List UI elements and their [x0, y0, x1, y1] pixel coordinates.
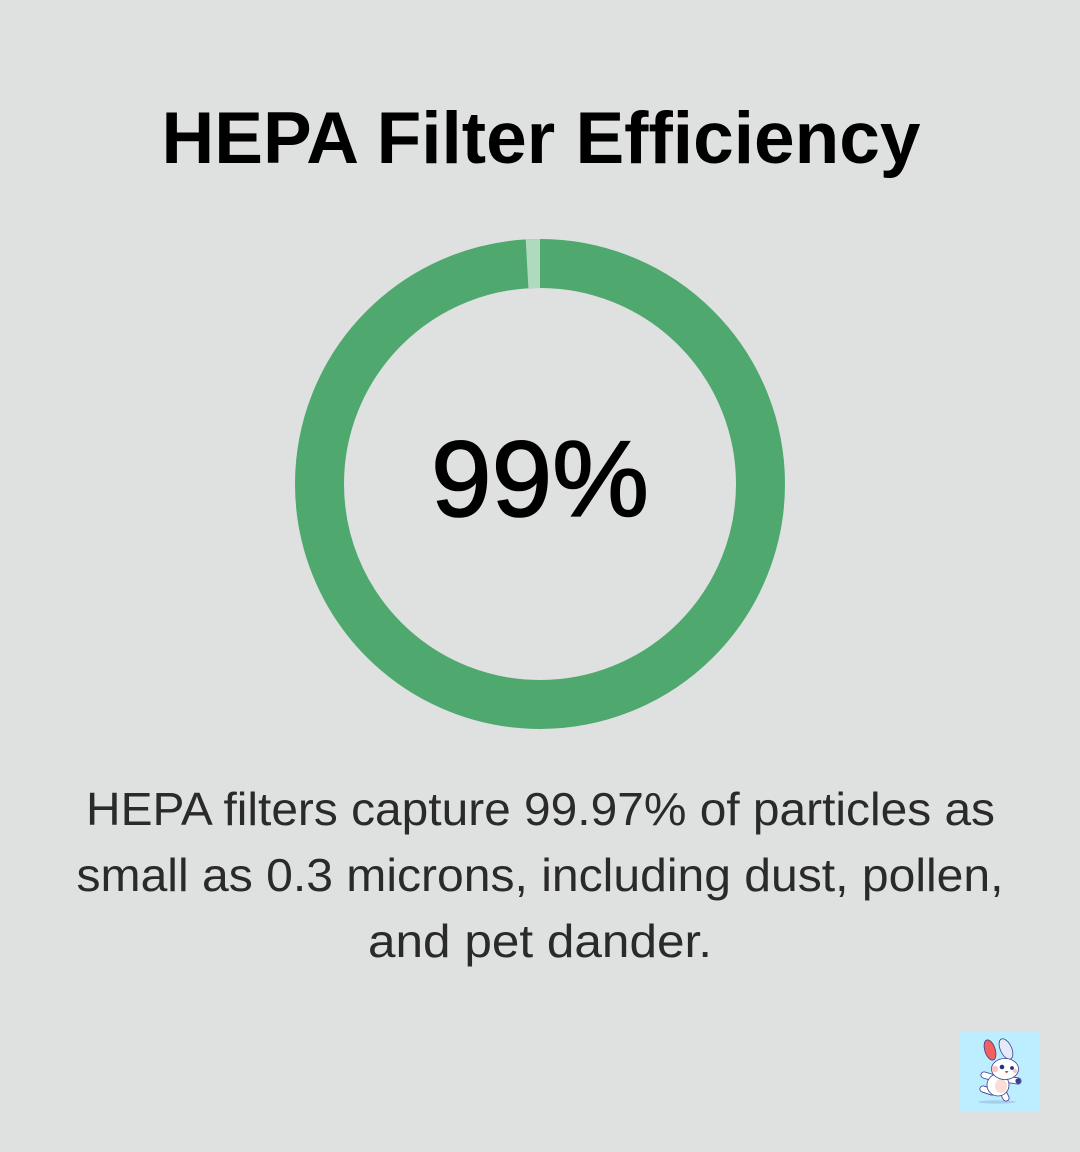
description text [76, 783, 1004, 967]
description text: HEPA filters capture 99.97% of particles as [86, 783, 995, 835]
eyes and mouth [1000, 1065, 1004, 1069]
donut chart: 99% [320, 239, 760, 704]
right ear [996, 1037, 1016, 1061]
head [992, 1058, 1018, 1080]
body [987, 1074, 1009, 1096]
donut main segment [320, 264, 760, 704]
title: HEPA Filter Efficiency [162, 98, 921, 179]
donut remainder segment [526, 239, 540, 288]
shadow [978, 1100, 1016, 1104]
left ear [982, 1038, 998, 1062]
arms and legs [983, 1075, 1018, 1098]
logo background [960, 1032, 1040, 1112]
paw [1015, 1078, 1021, 1084]
description text: small as 0.3 microns, including dust, pollen, [76, 849, 1004, 901]
cheeks [992, 1066, 998, 1072]
icon: rabbit logo [960, 1032, 1040, 1112]
description text: and pet dander. [368, 915, 712, 967]
donut value: 99% [431, 418, 649, 539]
